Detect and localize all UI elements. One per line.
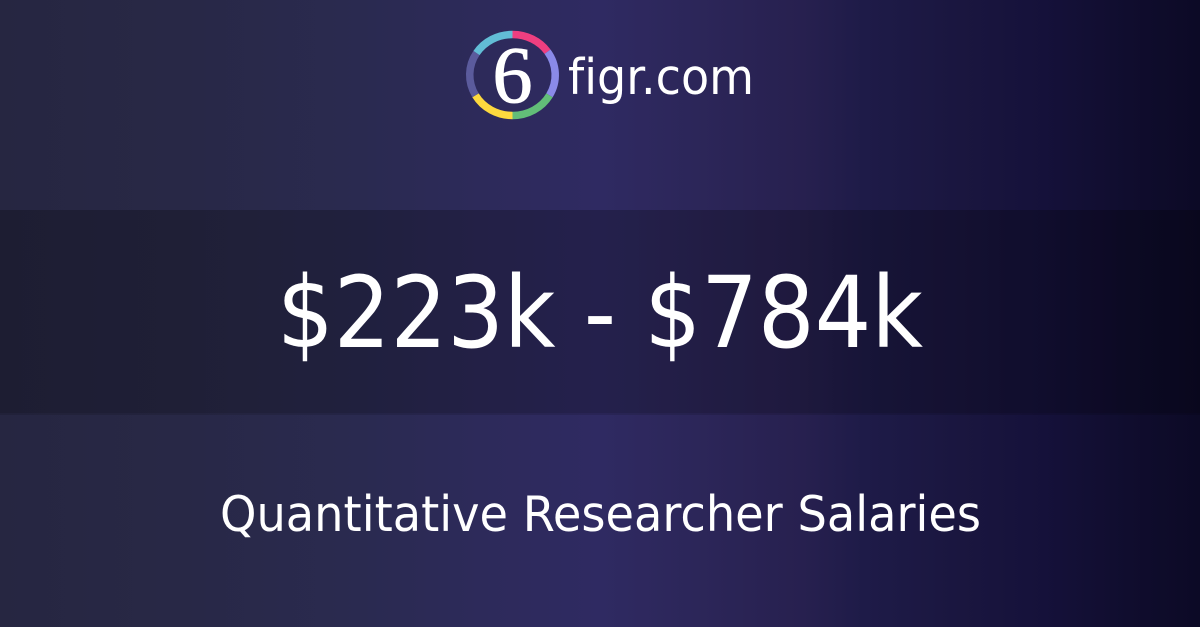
icon: 6figr logo ring bbox=[470, 34, 555, 116]
salary range: $223k - $784k bbox=[277, 256, 924, 371]
dark band bbox=[0, 210, 1200, 415]
logo numeral 6: 6 bbox=[492, 32, 532, 120]
subtitle: Quantitative Researcher Salaries bbox=[220, 486, 981, 543]
logo wordmark: figr.com bbox=[568, 49, 754, 106]
